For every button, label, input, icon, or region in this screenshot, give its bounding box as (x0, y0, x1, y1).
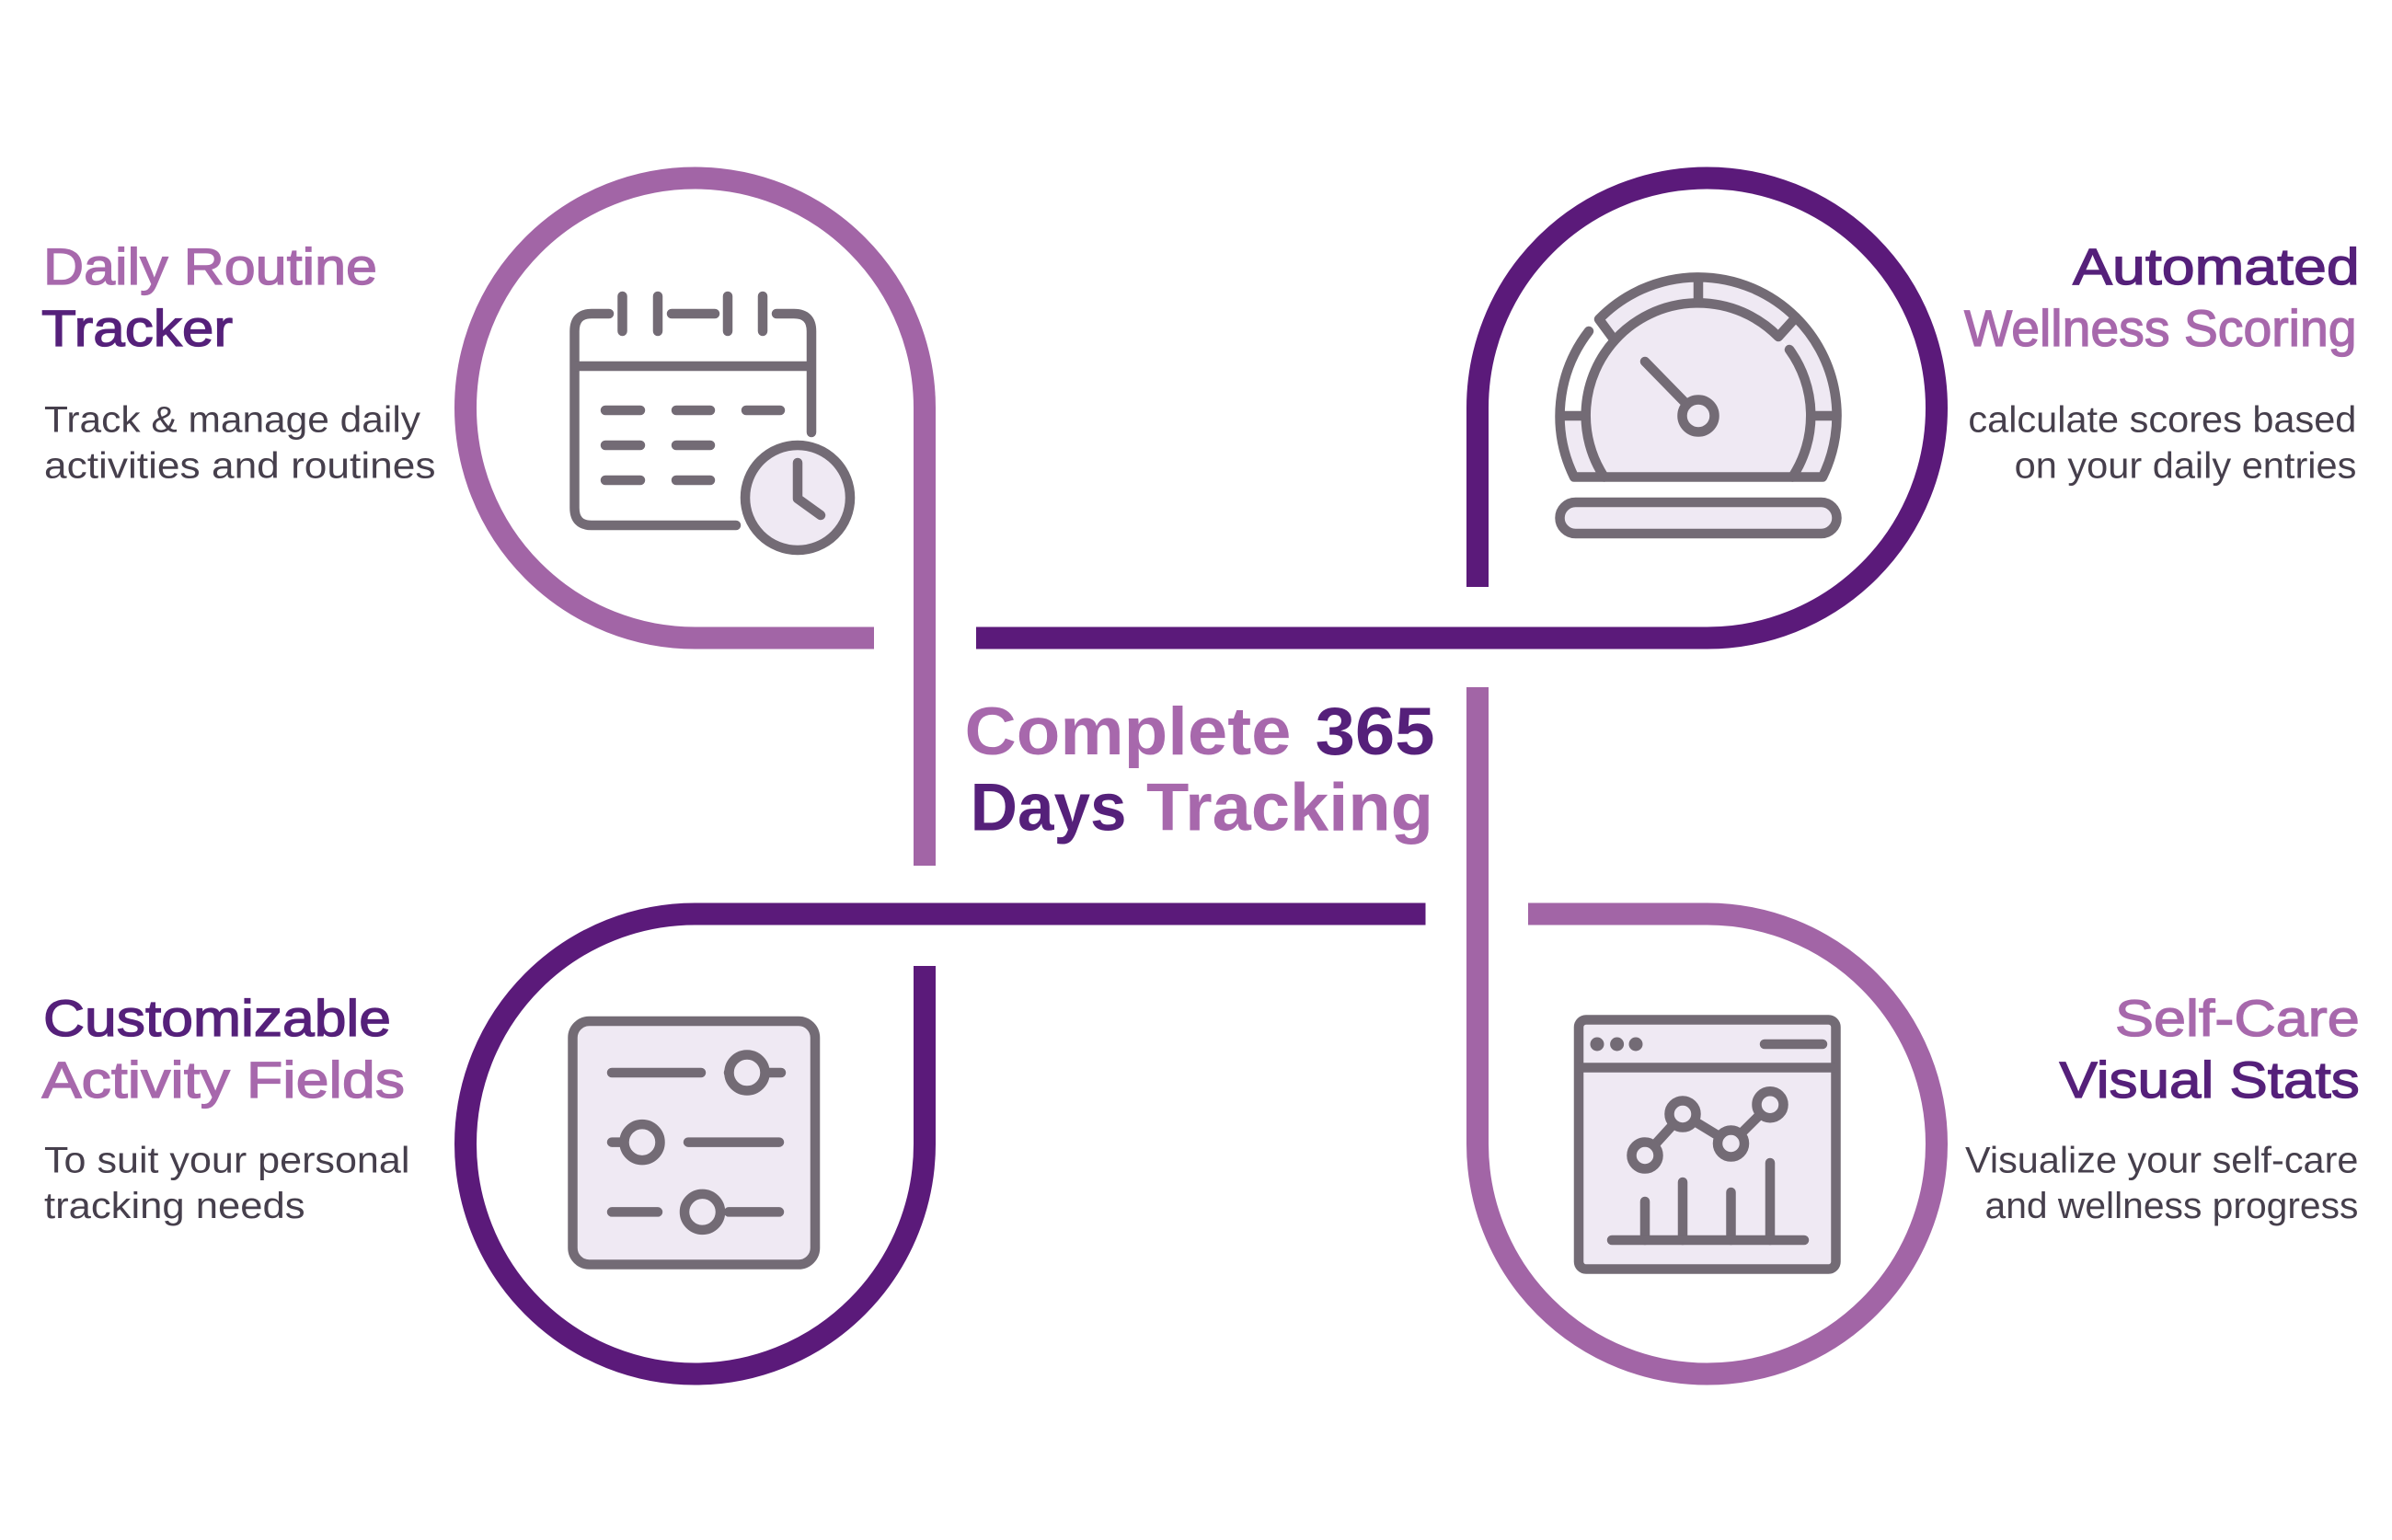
description: daily routine tracker: Track & manage daily (44, 400, 420, 441)
central title: Complete (964, 695, 1292, 769)
heading: daily routine tracker: Daily Routine (43, 237, 377, 295)
heading: self-care visual stats: Self-Care (2115, 989, 2360, 1047)
heading: automated wellness scoring: Wellness Scoring (1964, 299, 2357, 357)
description: daily routine tracker: activities and routines (44, 446, 436, 487)
description: customizable activity fields: To suit your personal (44, 1141, 409, 1181)
heading: self-care visual stats (2059, 989, 2360, 1109)
description: self-care visual stats (1965, 1141, 2358, 1226)
connector loop: top right (976, 178, 1937, 638)
description: customizable activity fields: tracking needs (44, 1186, 305, 1226)
connector loop: top left (466, 178, 925, 866)
heading: customizable activity fields: Activity Fields (42, 1051, 405, 1109)
heading: automated wellness scoring (1964, 237, 2360, 357)
heading: daily routine tracker (41, 237, 377, 357)
heading: customizable activity fields: Customizable (43, 989, 391, 1047)
description: daily routine tracker (44, 400, 436, 487)
central title: Days (971, 771, 1127, 845)
heading: customizable activity fields (42, 989, 405, 1109)
central title: Tracking (1146, 771, 1433, 845)
panel: customizable activity fields text (42, 989, 409, 1226)
description: customizable activity fields (44, 1141, 409, 1226)
heading: self-care visual stats: Visual Stats (2059, 1051, 2360, 1109)
description: automated wellness scoring (1968, 400, 2356, 487)
connector loop: bottom right (1478, 687, 1937, 1374)
panel: automated wellness scoring text (1964, 237, 2360, 487)
description: automated wellness scoring: calculate scores based (1968, 400, 2356, 441)
panel: daily routine tracker text (41, 237, 436, 487)
panel: self-care visual stats text (1965, 989, 2360, 1226)
central title (964, 695, 1435, 845)
heading: daily routine tracker: Tracker (41, 299, 233, 357)
icon: browser window with chart (1579, 1019, 1836, 1270)
icon: settings sliders (572, 1021, 815, 1264)
icon: speedometer gauge (1560, 277, 1837, 534)
description: self-care visual stats: and wellness progress (1985, 1186, 2358, 1226)
description: self-care visual stats: Visualize your self-care (1965, 1141, 2358, 1181)
central title: 365 (1316, 695, 1435, 769)
description: automated wellness scoring: on your daily entries (2015, 446, 2356, 487)
icon: calendar with clock (574, 296, 850, 550)
connector loop: bottom left (466, 914, 1426, 1374)
heading: automated wellness scoring: Automated (2073, 237, 2360, 295)
